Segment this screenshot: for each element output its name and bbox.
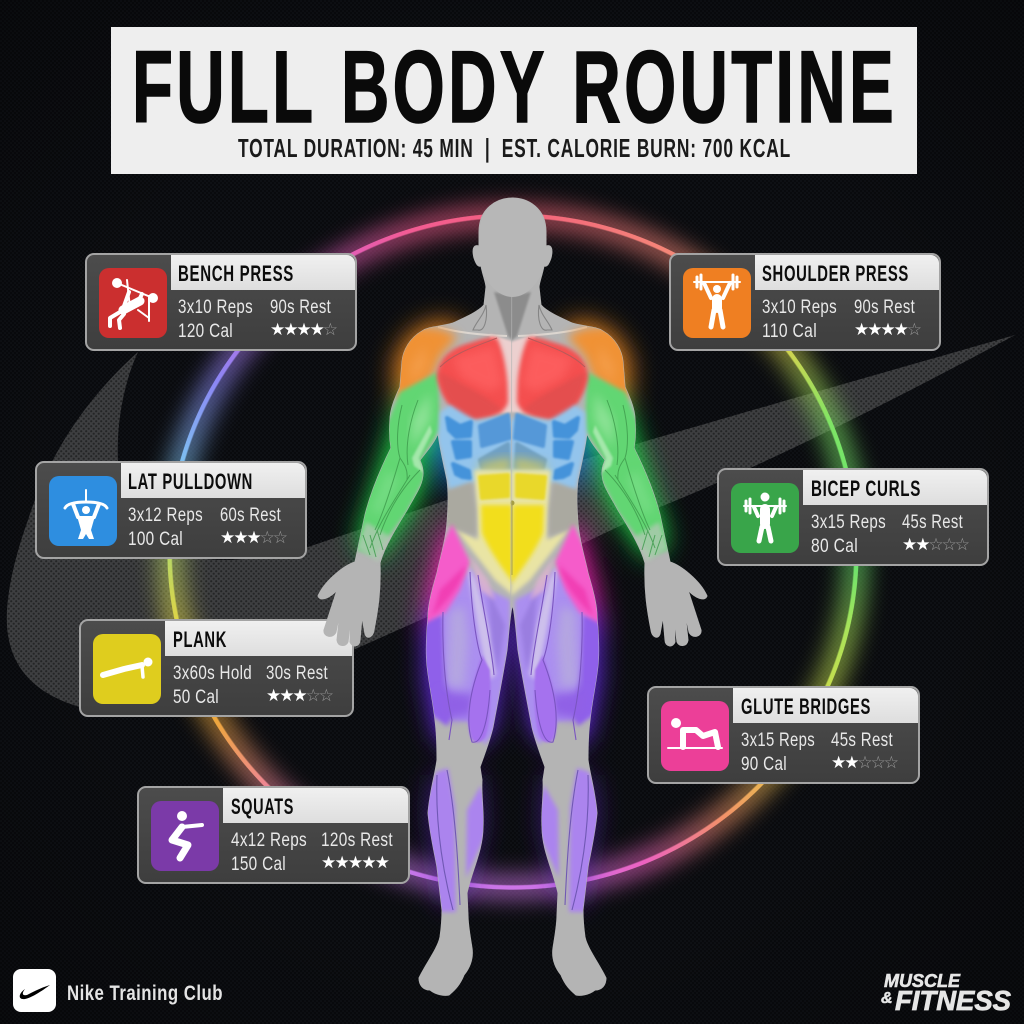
- exercise card: Lat Pulldown: 60s Rest: [220, 505, 281, 526]
- Muscle & Fitness logo: MUSCLE: [884, 971, 961, 991]
- adductor: [488, 590, 505, 672]
- exercise card: Glute Bridges: 3x15 Reps: [741, 730, 815, 751]
- exercise card: Bench Press: BENCH PRESS: [178, 261, 294, 286]
- exercise card: Plank: 3x60s Hold: [173, 663, 252, 684]
- exercise card: Squats: 150 Cal: [231, 854, 286, 875]
- serratus blocks: [447, 418, 471, 478]
- exercise card: Shoulder Press: ★★★★☆: [854, 320, 922, 340]
- exercise card: Lat Pulldown: [36, 462, 306, 558]
- body colour glow: [362, 328, 663, 910]
- icon: bench press: [99, 268, 167, 338]
- exercise card: Bicep Curls: [718, 469, 988, 565]
- neon ring glow: [143, 188, 884, 916]
- pectoral: [437, 337, 508, 419]
- neck shading: [494, 292, 514, 341]
- teardrop muscle: [468, 655, 491, 742]
- anatomical body figure: [318, 198, 707, 995]
- Nike Training Club logo: Nike Training Club: [67, 982, 223, 1005]
- exercise card: Squats: [138, 787, 409, 883]
- icon: plank: [93, 634, 161, 704]
- title banner: [111, 27, 917, 174]
- head: [473, 198, 552, 297]
- large swoosh watermark: [7, 335, 1015, 713]
- outer quad: [418, 615, 452, 726]
- Muscle & Fitness logo: &: [881, 990, 893, 1007]
- exercise card: Squats: SQUATS: [231, 794, 294, 819]
- exercise card: Plank: [80, 620, 353, 716]
- exercise card: Plank: ★★★☆☆: [266, 686, 334, 706]
- chest centre pale: [490, 334, 514, 414]
- icon: squats: [151, 801, 219, 871]
- Muscle & Fitness logo: [881, 971, 1011, 1016]
- hip magenta: [420, 524, 470, 626]
- inner strip: [466, 562, 496, 680]
- upper abs: [480, 415, 510, 446]
- exercise card: Shoulder Press: 110 Cal: [762, 321, 817, 342]
- exercise card: Bench Press: [86, 254, 356, 350]
- calves: [420, 768, 456, 912]
- exercise card: Squats: 120s Rest: [321, 830, 393, 851]
- exercise card: Glute Bridges: [648, 687, 919, 783]
- exercise card: Lat Pulldown: ★★★☆☆: [220, 528, 288, 548]
- lower quad: [440, 690, 476, 720]
- exercise card: Bench Press: 3x10 Reps: [178, 297, 253, 318]
- thigh lavender base: [415, 568, 510, 745]
- wrist fade: [357, 522, 392, 562]
- icon: lat pulldown: [49, 476, 117, 546]
- exercise card: Bench Press: ★★★★☆: [270, 320, 338, 340]
- exercise card: Bicep Curls: 45s Rest: [902, 512, 963, 533]
- central quad light: [447, 606, 468, 688]
- lower torso pale: [455, 470, 514, 596]
- icon: bicep curls: [731, 483, 799, 553]
- exercise card: Plank: PLANK: [173, 627, 227, 652]
- exercise card: Plank: 30s Rest: [266, 663, 328, 684]
- exercise card: Glute Bridges: ★★☆☆☆: [831, 753, 899, 773]
- exercise card: Bench Press: 120 Cal: [178, 321, 233, 342]
- exercise card: Bench Press: 90s Rest: [270, 297, 331, 318]
- exercise card: Glute Bridges: 45s Rest: [831, 730, 893, 751]
- exercise card: Lat Pulldown: LAT PULLDOWN: [128, 469, 253, 494]
- exercise card: Shoulder Press: [670, 254, 940, 350]
- exercise card: Glute Bridges: 90 Cal: [741, 754, 787, 775]
- Muscle & Fitness logo: FITNESS: [895, 985, 1011, 1016]
- icon: glute bridges: [661, 701, 729, 771]
- exercise card: Bicep Curls: BICEP CURLS: [811, 476, 921, 501]
- exercise card: Squats: 4x12 Reps: [231, 830, 307, 851]
- exercise card: Bicep Curls: 3x15 Reps: [811, 512, 886, 533]
- exercise card: Shoulder Press: 3x10 Reps: [762, 297, 837, 318]
- yellow abs: [480, 475, 508, 498]
- exercise card: Lat Pulldown: 3x12 Reps: [128, 505, 203, 526]
- neon ring: [167, 213, 859, 890]
- exercise card: Squats: ★★★★★: [321, 853, 390, 873]
- exercise card: Shoulder Press: 90s Rest: [854, 297, 915, 318]
- shoulder line: [438, 327, 507, 336]
- exercise card: Lat Pulldown: 100 Cal: [128, 529, 183, 550]
- exercise card: Bicep Curls: 80 Cal: [811, 536, 858, 557]
- exercise card: Glute Bridges: GLUTE BRIDGES: [741, 694, 871, 719]
- exercise card: Plank: 50 Cal: [173, 687, 219, 708]
- exercise card: Shoulder Press: SHOULDER PRESS: [762, 261, 909, 286]
- Nike Training Club logo: [13, 969, 223, 1012]
- torso blue base: [438, 405, 514, 492]
- deltoid: [390, 325, 458, 402]
- exercise card: Bicep Curls: ★★☆☆☆: [902, 535, 970, 555]
- icon: shoulder press: [683, 268, 751, 338]
- arm green: [345, 372, 440, 556]
